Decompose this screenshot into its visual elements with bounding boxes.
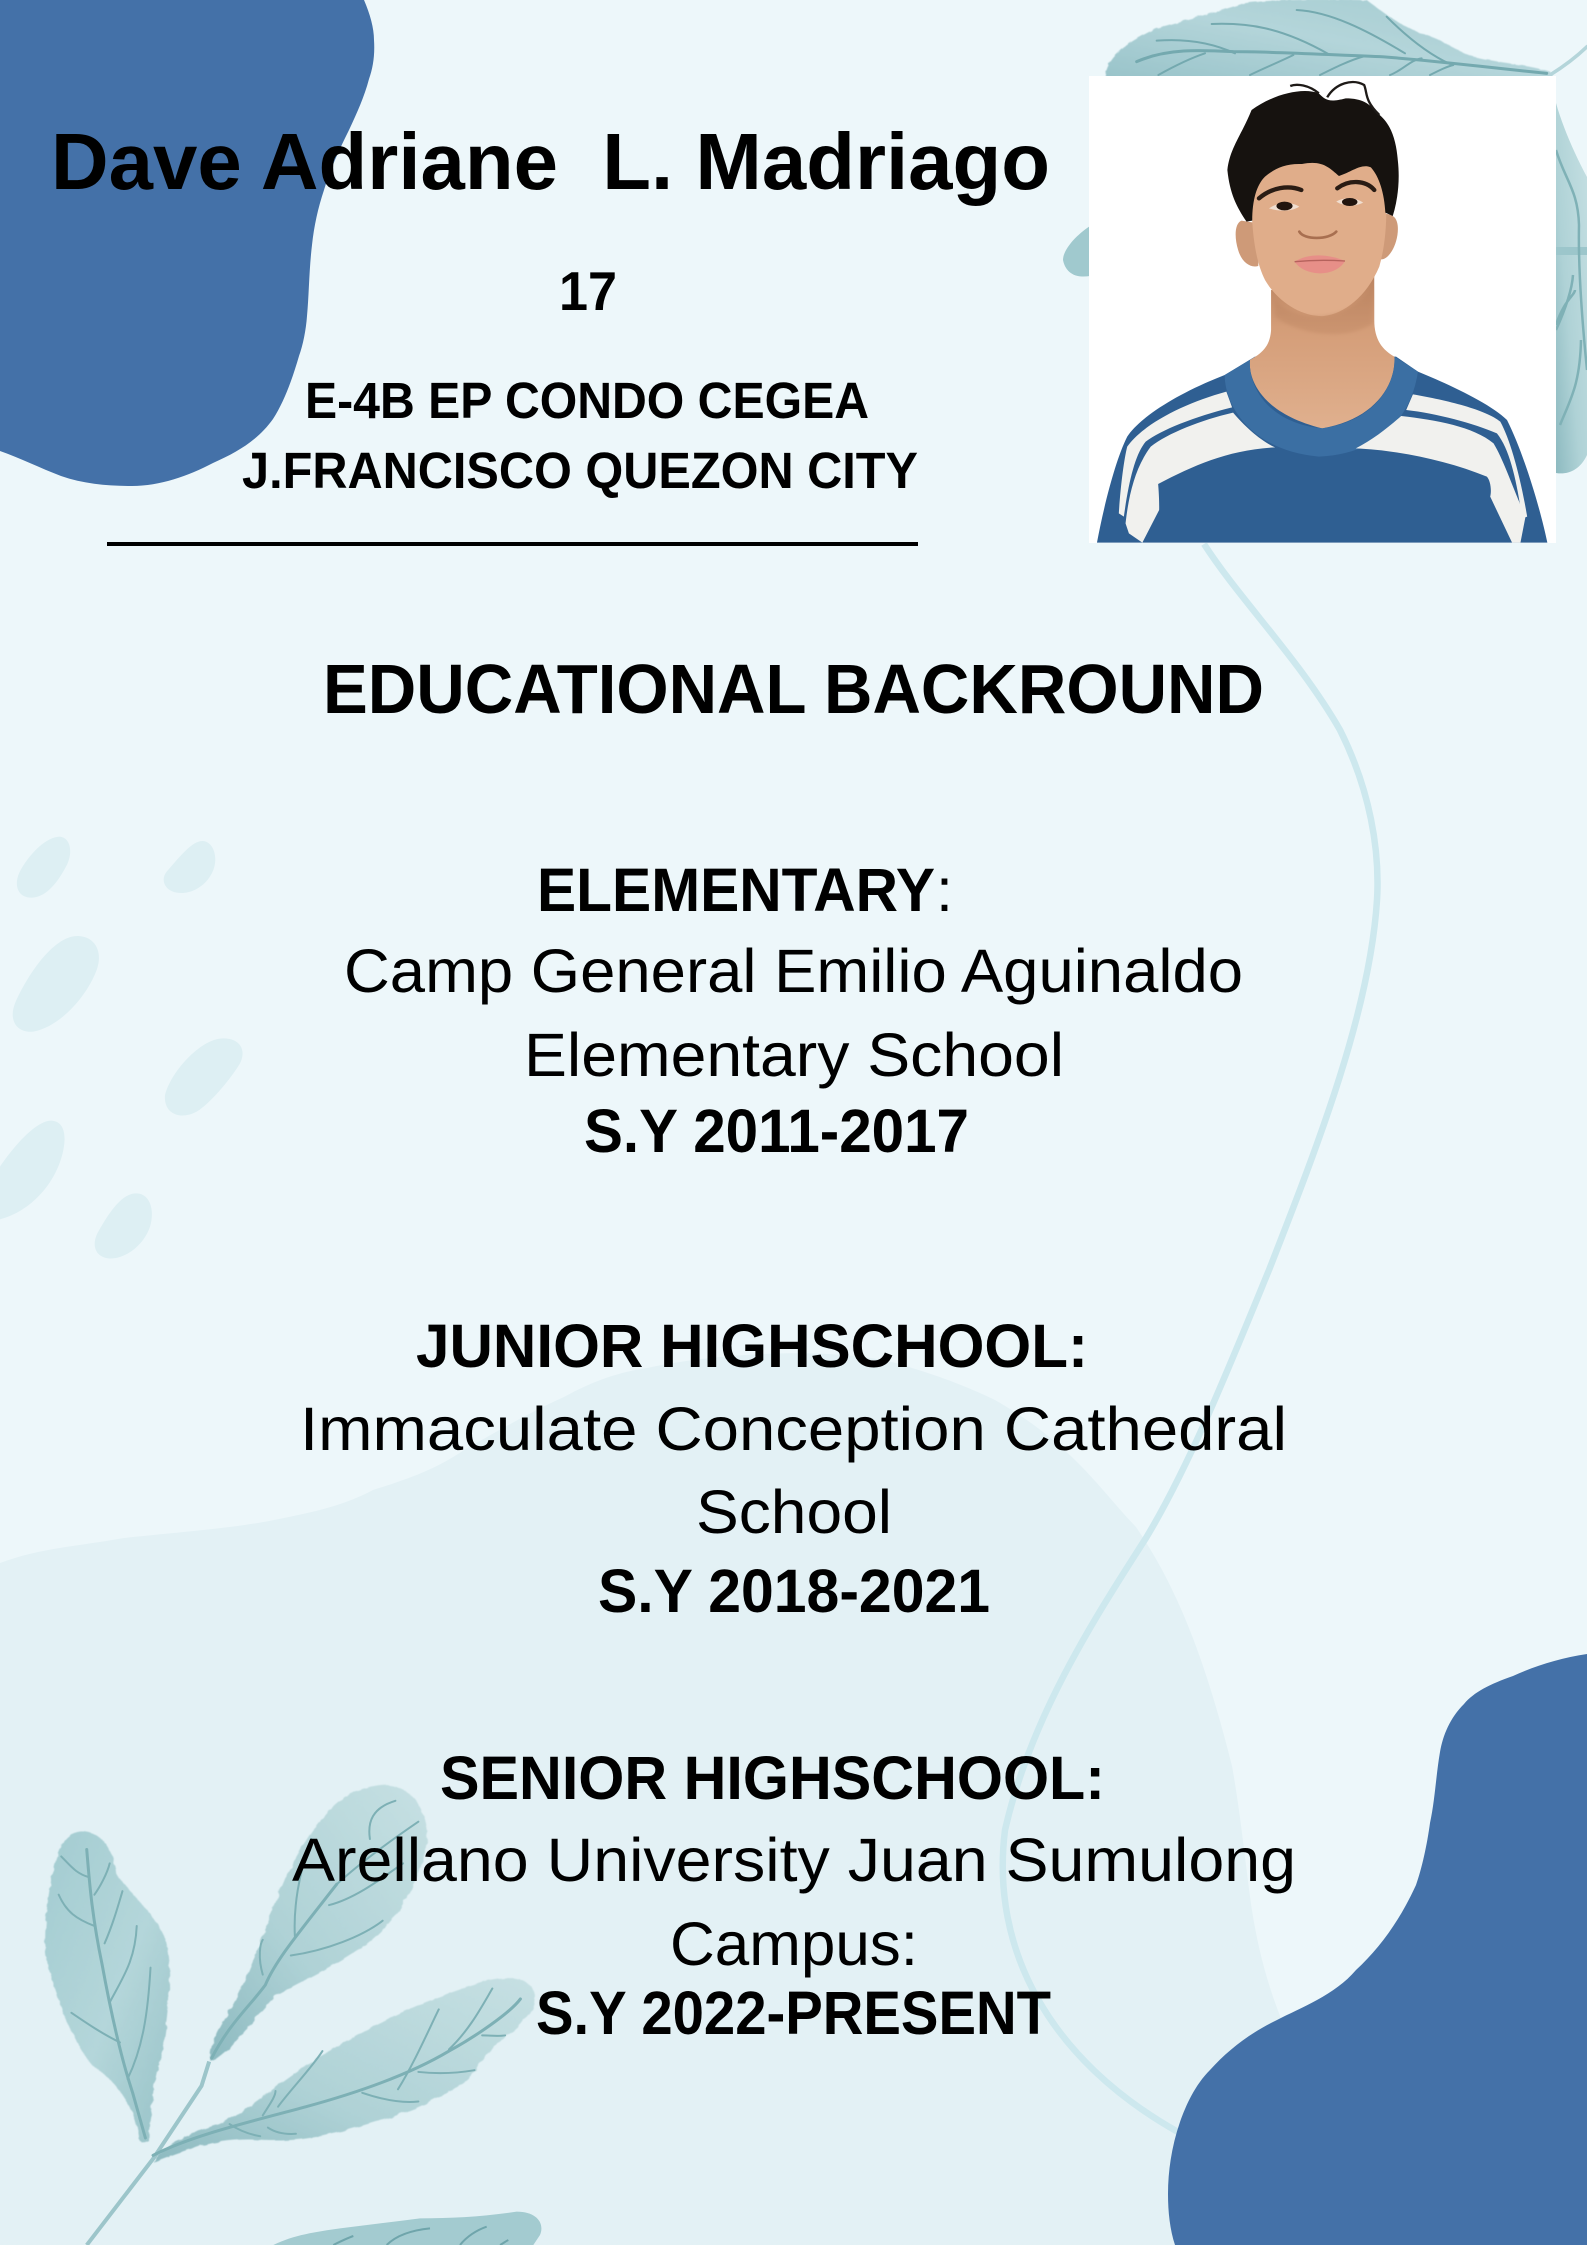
divider line xyxy=(107,542,918,546)
eyes xyxy=(1269,198,1363,211)
collar xyxy=(1225,357,1418,457)
address: E-4B EP CONDO CEGEA xyxy=(305,372,869,429)
senior highschool block: S.Y 2022-PRESENT xyxy=(536,1979,1051,2047)
chin shadow xyxy=(1275,287,1373,334)
shirt xyxy=(1097,357,1547,543)
leaf: right edge xyxy=(1556,103,1587,473)
leaf: top right xyxy=(1105,0,1587,80)
neck xyxy=(1250,273,1395,428)
senior highschool block: Arellano University Juan Sumulong xyxy=(292,1826,1296,1894)
name heading: Dave Adriane L. Madriago xyxy=(51,117,1050,206)
elementary block: ELEMENTARY xyxy=(537,856,935,924)
junior highschool block: JUNIOR HIGHSCHOOL: xyxy=(416,1312,1088,1380)
address xyxy=(242,372,918,499)
top-left blue blob xyxy=(0,0,374,486)
senior highschool block xyxy=(292,1744,1296,2047)
portrait photo xyxy=(1089,76,1556,543)
junior highschool block: S.Y 2018-2021 xyxy=(598,1557,990,1625)
junior highschool block: Immaculate Conception Cathedral xyxy=(300,1395,1287,1463)
junior highschool block: School xyxy=(696,1478,892,1546)
pale background shape xyxy=(0,1353,1290,2245)
age: 17 xyxy=(559,260,617,322)
junior highschool block xyxy=(300,1312,1287,1625)
decorative droplets xyxy=(0,837,243,1258)
hair wisps xyxy=(1290,82,1379,115)
elementary block: : xyxy=(936,856,953,924)
face xyxy=(1251,153,1386,316)
leaf tip beside photo xyxy=(1063,226,1090,277)
shirt stripes xyxy=(1119,392,1527,543)
leaf: bottom edge xyxy=(273,2212,541,2245)
eyebrows xyxy=(1259,182,1374,198)
elementary block xyxy=(344,856,1243,1165)
nose xyxy=(1299,232,1336,238)
elementary block: S.Y 2011-2017 xyxy=(584,1097,969,1165)
senior highschool block: SENIOR HIGHSCHOOL: xyxy=(440,1744,1105,1812)
leaves: bottom left branch xyxy=(45,1785,535,2245)
address: J.FRANCISCO QUEZON CITY xyxy=(242,442,918,499)
hair xyxy=(1227,91,1399,222)
ears xyxy=(1236,221,1258,266)
senior highschool block: Campus: xyxy=(670,1910,918,1978)
bottom-right blue blob xyxy=(1168,1654,1587,2245)
elementary block: Elementary School xyxy=(524,1021,1064,1089)
section heading: EDUCATIONAL BACKROUND xyxy=(323,650,1264,728)
mouth xyxy=(1295,255,1345,273)
thin curved line xyxy=(1003,544,1378,2132)
elementary block: Camp General Emilio Aguinaldo xyxy=(344,937,1243,1005)
